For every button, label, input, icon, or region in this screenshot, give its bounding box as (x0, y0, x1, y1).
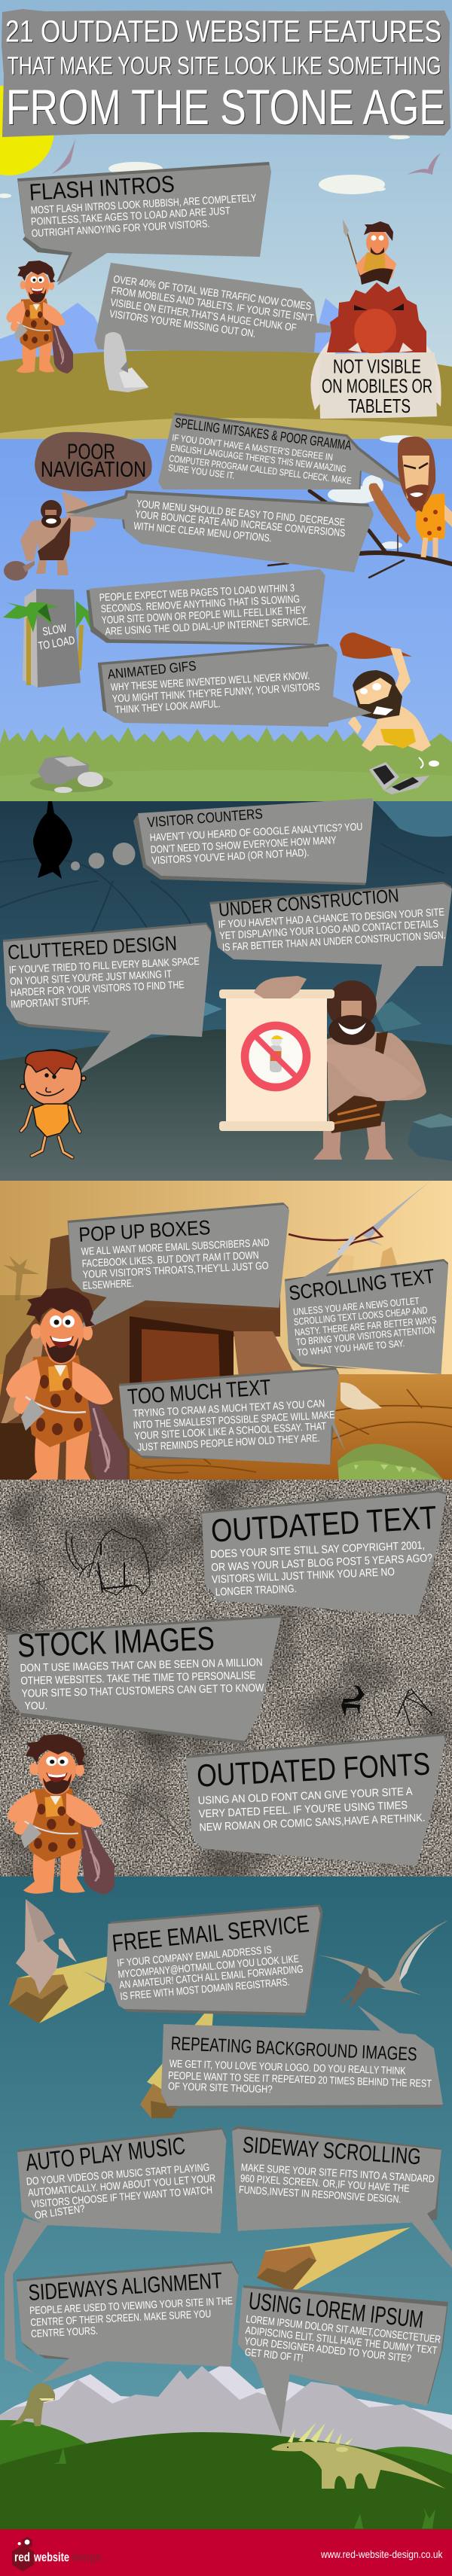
body text (30, 191, 257, 239)
section: desert background (0, 1172, 452, 1480)
panel: sideway scrolling (232, 2126, 452, 2268)
hill (0, 350, 452, 439)
heading: VISITOR COUNTERS (147, 806, 263, 831)
body text (111, 669, 320, 715)
character: t-rex (10, 2383, 55, 2426)
distant rock column (379, 1247, 399, 1273)
title plaque (2, 9, 450, 137)
body text (133, 1397, 335, 1453)
panel: sideways alignment (17, 2261, 238, 2383)
body text: VISITORS YOU'VE HAD (OR NOT HAD). (151, 846, 310, 866)
body text: JUST REMINDS PEOPLE HOW OLD THEY ARE. (137, 1431, 320, 1453)
body text (293, 1295, 437, 1358)
body text: COMPUTER PROGRAM CALLED SPELL CHECK. MAKE (169, 453, 352, 486)
body text: YOUR SITE DOWN OR PEOPLE WILL FEEL LIKE THEY (101, 604, 307, 626)
icon: rock pile (30, 755, 113, 793)
character: perched pterosaur (16, 1899, 77, 1994)
logo (12, 2537, 101, 2571)
body text: ARE USING THE OLD DIAL-UP INTERNET SERVICE. (105, 615, 311, 637)
panel: under construction (209, 882, 452, 1019)
heading: ANIMATED GIFS (107, 658, 197, 682)
character: muscled caveman with scroll (313, 980, 426, 1160)
heading: UNDER CONSTRUCTION (218, 885, 400, 921)
thought bubbles (71, 843, 136, 870)
body text: TRYING TO CRAM AS MUCH TEXT AS YOU CAN (133, 1397, 325, 1419)
body text: NEW ROMAN OR COMIC SANS,HAVE A RETHINK. (199, 1812, 426, 1834)
tiger tunic (328, 1032, 388, 1133)
body (327, 1030, 426, 1122)
body text: IF YOU'VE TRIED TO FILL EVERY BLANK SPACE (9, 955, 200, 976)
body text: WHY THESE WERE INVENTED WE'LL NEVER KNOW. (111, 669, 310, 693)
background rocks (170, 1001, 422, 1048)
body text: USING AN OLD FONT CAN GIVE YOUR SITE A (197, 1786, 413, 1807)
body text: VERY DATED FEEL. IF YOU'RE USING TIMES (198, 1800, 408, 1821)
legs (313, 1122, 393, 1160)
panel: outdated text (202, 1490, 446, 1615)
body text (149, 820, 363, 866)
rider (356, 221, 396, 279)
body text: HARDER FOR YOUR VISITORS TO FIND THE (10, 978, 185, 998)
body text: WE ALL WANT MORE EMAIL SUBSCRIBERS AND (81, 1236, 270, 1258)
grass tufts (53, 2447, 435, 2529)
character: flying pterodactyl (316, 1920, 448, 2010)
body text (167, 432, 352, 486)
body text (81, 1236, 270, 1291)
stone text (38, 622, 76, 653)
panel: visitor counters (133, 798, 374, 886)
panel: animated gifs (98, 644, 372, 727)
body text: YOUR MENU SHOULD BE EASY TO FIND. DECREASE (136, 497, 346, 528)
body text: FROM MOBILES AND TABLETS. IF YOUR SITE ISN'T (111, 284, 315, 324)
body text: POINTLESS,TAKE AGES TO LOAD AND ARE JUST (31, 204, 231, 227)
mountains (0, 298, 452, 392)
body text: OVER 40% OF TOTAL WEB TRAFFIC NOW COMES (113, 273, 312, 312)
stone text: TO LOAD (38, 634, 76, 653)
hanging sign (319, 352, 437, 419)
heading: STOCK IMAGES (17, 1620, 215, 1665)
body text: DOES YOUR SITE STILL SAY COPYRIGHT 2001, (210, 1540, 425, 1561)
body text: YOU MIGHT THINK THEY'RE FUNNY, YOUR VISITORS (112, 680, 320, 705)
panel: mobiles and tablets (95, 263, 353, 352)
body text: SURE YOU USE IT. (167, 462, 235, 481)
mammoth body (327, 282, 426, 352)
panel: spelling mistakes (158, 413, 408, 489)
body text: ENGLISH LANGUAGE THERE'S THIS NEW AMAZING (170, 442, 347, 474)
heading: SIDEWAYS ALIGNMENT (28, 2268, 223, 2306)
panel: repeating background images (161, 2005, 443, 2108)
body text: YOUR VISITOR'S THROATS,THEY'LL JUST GO (82, 1259, 269, 1280)
birds (52, 139, 441, 175)
grass (0, 727, 452, 801)
body text (26, 2161, 216, 2221)
body text: 960 PIXEL SCREEN. OR,IF YOU HAVE THE (240, 2172, 410, 2194)
heading: FREE EMAIL SERVICE (111, 1910, 310, 1957)
body text: VISITORS YOU'RE MISSING OUT ON. (108, 307, 257, 340)
body text: DON'T NEED TO SHOW EVERYONE HOW MANY (150, 834, 337, 855)
section: cave background (0, 801, 452, 1181)
body text: DO YOUR VIDEOS OR MUSIC START PLAYING (26, 2161, 210, 2187)
panel: auto play music (5, 2127, 226, 2373)
cave painting: hunter (397, 1688, 432, 1726)
body text: IF YOU DON'T HAVE A MASTER'S DEGREE IN (172, 432, 334, 463)
body text: LONGER TRADING. (215, 1583, 297, 1599)
pointing arm (313, 1044, 422, 1101)
sand band (0, 418, 452, 439)
logo: website (33, 2550, 69, 2565)
desert ground (0, 1374, 452, 1480)
body text (133, 497, 346, 544)
body text: DON T USE IMAGES THAT CAN BE SEEN ON A MILLION (20, 1657, 263, 1675)
body text: PEOPLE EXPECT WEB PAGES TO LOAD WITHIN 3 (99, 581, 295, 603)
character: green dinosaur (337, 1444, 445, 1482)
body text (9, 955, 200, 1010)
body text: MYCOMPANY@HOTMAIL.COM YOU LOOK LIKE (118, 1953, 299, 1980)
panel: pop up boxes (68, 1203, 289, 1338)
foreground rock (408, 1114, 452, 1161)
character: long-necked spiky dinosaur (271, 2422, 445, 2489)
heading: CLUTTERED DESIGN (7, 931, 178, 964)
character: bearded caveman with club (369, 437, 452, 557)
cave painting: star mark (30, 1574, 54, 1595)
animal skull (341, 1383, 382, 1410)
cave wall lines (0, 801, 452, 979)
body text: OTHER WEBSITES. TAKE THE TIME TO PERSONALISE (20, 1669, 256, 1687)
body text: FACEBOOK LIKES. BUT DON'T RAM IT DOWN (81, 1248, 259, 1270)
icon: prohibition scroll (219, 976, 334, 1131)
panel: free email service (82, 1904, 323, 2016)
panel: using lorem ipsum (238, 2285, 448, 2434)
body text: OR LISTEN? (34, 2202, 86, 2221)
icon: broken laptop (369, 758, 439, 794)
panel: slow to load (87, 569, 325, 645)
sign text: POOR (67, 440, 115, 464)
body text: YOUR SITE LOOK LIKE A SCHOOL ESSAY. THAT (134, 1419, 327, 1442)
left palm (3, 602, 59, 685)
cave floor (0, 1029, 452, 1181)
sign text: NOT VISIBLE (333, 355, 421, 378)
logo: red (14, 2550, 30, 2565)
body text (239, 2161, 435, 2205)
panel: outdated fonts (186, 1733, 445, 1866)
cave painting: ibex (341, 1685, 365, 1717)
body text (210, 1540, 432, 1599)
panel: poor navigation (66, 490, 374, 572)
heading: FLASH INTROS (29, 171, 176, 206)
spear (347, 233, 360, 276)
meteor streaks and rocks (9, 1956, 411, 2293)
body text: OF YOUR SITE THOUGH? (168, 2080, 273, 2095)
mountains and hills (0, 2363, 452, 2529)
body text: YOUR DESIGNER ADDED TO YOUR SITE? (244, 2334, 412, 2364)
body text (29, 2294, 233, 2340)
sign text (41, 440, 146, 482)
body text: ON YOUR SITE YOU'RE JUST MAKING IT (10, 968, 173, 987)
stone text: SLOW (41, 622, 68, 639)
body text: SECONDS. REMOVE ANYTHING THAT IS SLOWING (100, 593, 300, 614)
section: stone wall background (0, 1480, 452, 1876)
body text: PEOPLE ARE USED TO VIEWING YOUR SITE IN THE (29, 2294, 233, 2316)
body text (108, 273, 315, 340)
title text (5, 14, 445, 135)
body text (218, 906, 446, 953)
character: caveman riding mammoth (310, 219, 441, 419)
sign text: TABLETS (348, 395, 411, 417)
body text (197, 1786, 426, 1834)
footer bar (0, 2529, 452, 2576)
icon: stone rock (104, 332, 148, 392)
body text: CENTRE OF THEIR SCREEN. MAKE SURE YOU (30, 2307, 211, 2328)
panel: too much text (119, 1367, 345, 1465)
cave dwelling rock (0, 1235, 297, 1480)
body text (117, 1943, 304, 2002)
body text: ELSEWHERE. (82, 1277, 134, 1291)
body text: YOUR SITE SO THAT CUSTOMERS CAN GET TO KNOW (21, 1682, 264, 1700)
character: angry caveman with club (340, 633, 431, 751)
body text: HAVEN'T YOU HEARD OF GOOGLE ANALYTICS? YOU (149, 820, 363, 843)
body text: IF YOUR COMPANY EMAIL ADDRESS IS (117, 1943, 272, 1969)
body text: GET RID OF IT! (244, 2346, 304, 2364)
head (327, 980, 377, 1030)
icon: sun (0, 85, 54, 175)
logo: design (71, 2550, 101, 2565)
right palm (76, 601, 105, 670)
section: teal sky background (0, 1876, 452, 2529)
body text: AUTOMATICALLY. HOW ABOUT YOU LET YOUR (27, 2172, 216, 2199)
body text: VISITORS CHOOSE IF THEY WANT TO WATCH (31, 2184, 212, 2210)
icon: gravestone with palm trees (3, 589, 105, 687)
heading: TOO MUCH TEXT (127, 1376, 272, 1410)
icon: hanging bat (33, 801, 72, 879)
rock cracks (0, 1491, 384, 1837)
body text: VISITORS WILL JUST THINK YOU ARE NO (212, 1566, 395, 1586)
cave painting: mammoth (66, 1529, 150, 1595)
palm silhouette (3, 1256, 39, 1300)
tusks (310, 339, 341, 410)
pterodactyl in sky (289, 1172, 442, 1276)
clouds (328, 435, 419, 549)
panel: stock images (8, 1615, 281, 1744)
body text: IMPORTANT STUFF. (11, 995, 90, 1010)
character: muscled caveman holding sign (4, 432, 152, 581)
body text: AN AMATEUR! CATCH ALL EMAIL FORWARDING (119, 1962, 304, 1991)
panel: flash intros (17, 162, 271, 285)
panel: scrolling text (285, 1254, 448, 1374)
body text: WITH NICE CLEAR MENU OPTIONS. (133, 520, 272, 544)
body text: YOU. (24, 1700, 47, 1712)
character: caveman presenting (8, 1734, 118, 1895)
heading: SPELLING MITSAKES & POOR GRAMMA (174, 415, 353, 453)
body text: MOST FLASH INTROS LOOK RUBBISH, ARE COMPLETELY (30, 191, 257, 216)
heading: AUTO PLAY MUSIC (24, 2132, 187, 2176)
body text: FUNDS,INVEST IN RESPONSIVE DESIGN. (239, 2183, 402, 2205)
body text: THINK THEY LOOK AWFUL. (115, 697, 221, 715)
body text: IS FREE WITH MOST DOMAIN REGISTRARS. (120, 1975, 290, 2002)
body text: INTO THE SMALLEST POSSIBLE SPACE WILL MAKE (133, 1408, 335, 1431)
wooden sign (35, 432, 152, 491)
body text (168, 2057, 432, 2095)
section: blue sky and grass background (0, 435, 452, 801)
tree branch (268, 491, 452, 578)
body text: OUTRIGHT ANNOYING FOR YOUR VISITORS. (31, 217, 210, 239)
sign text: NAVIGATION (41, 458, 146, 482)
body text (20, 1657, 264, 1712)
heading: POP UP BOXES (78, 1216, 211, 1246)
ground cracks (121, 1389, 452, 1473)
body text: YOUR BOUNCE RATE AND INCREASE CONVERSIONS (135, 508, 346, 539)
character: smiling cave kid (20, 1050, 86, 1157)
body text (99, 581, 311, 637)
sign text (322, 355, 432, 417)
panel: cluttered design (3, 922, 211, 1075)
section: sky and hills background (0, 0, 452, 439)
body text: VISIBLE ON EITHER,THAT'S A HUGE CHUNK OF (110, 296, 297, 334)
character: caveman with club (6, 261, 75, 373)
body text: TO WHAT YOU HAVE TO SAY. (297, 1337, 405, 1358)
clouds (0, 135, 410, 198)
character: large caveman with club (6, 1288, 130, 1489)
body text: CENTRE YOURS. (31, 2324, 98, 2340)
